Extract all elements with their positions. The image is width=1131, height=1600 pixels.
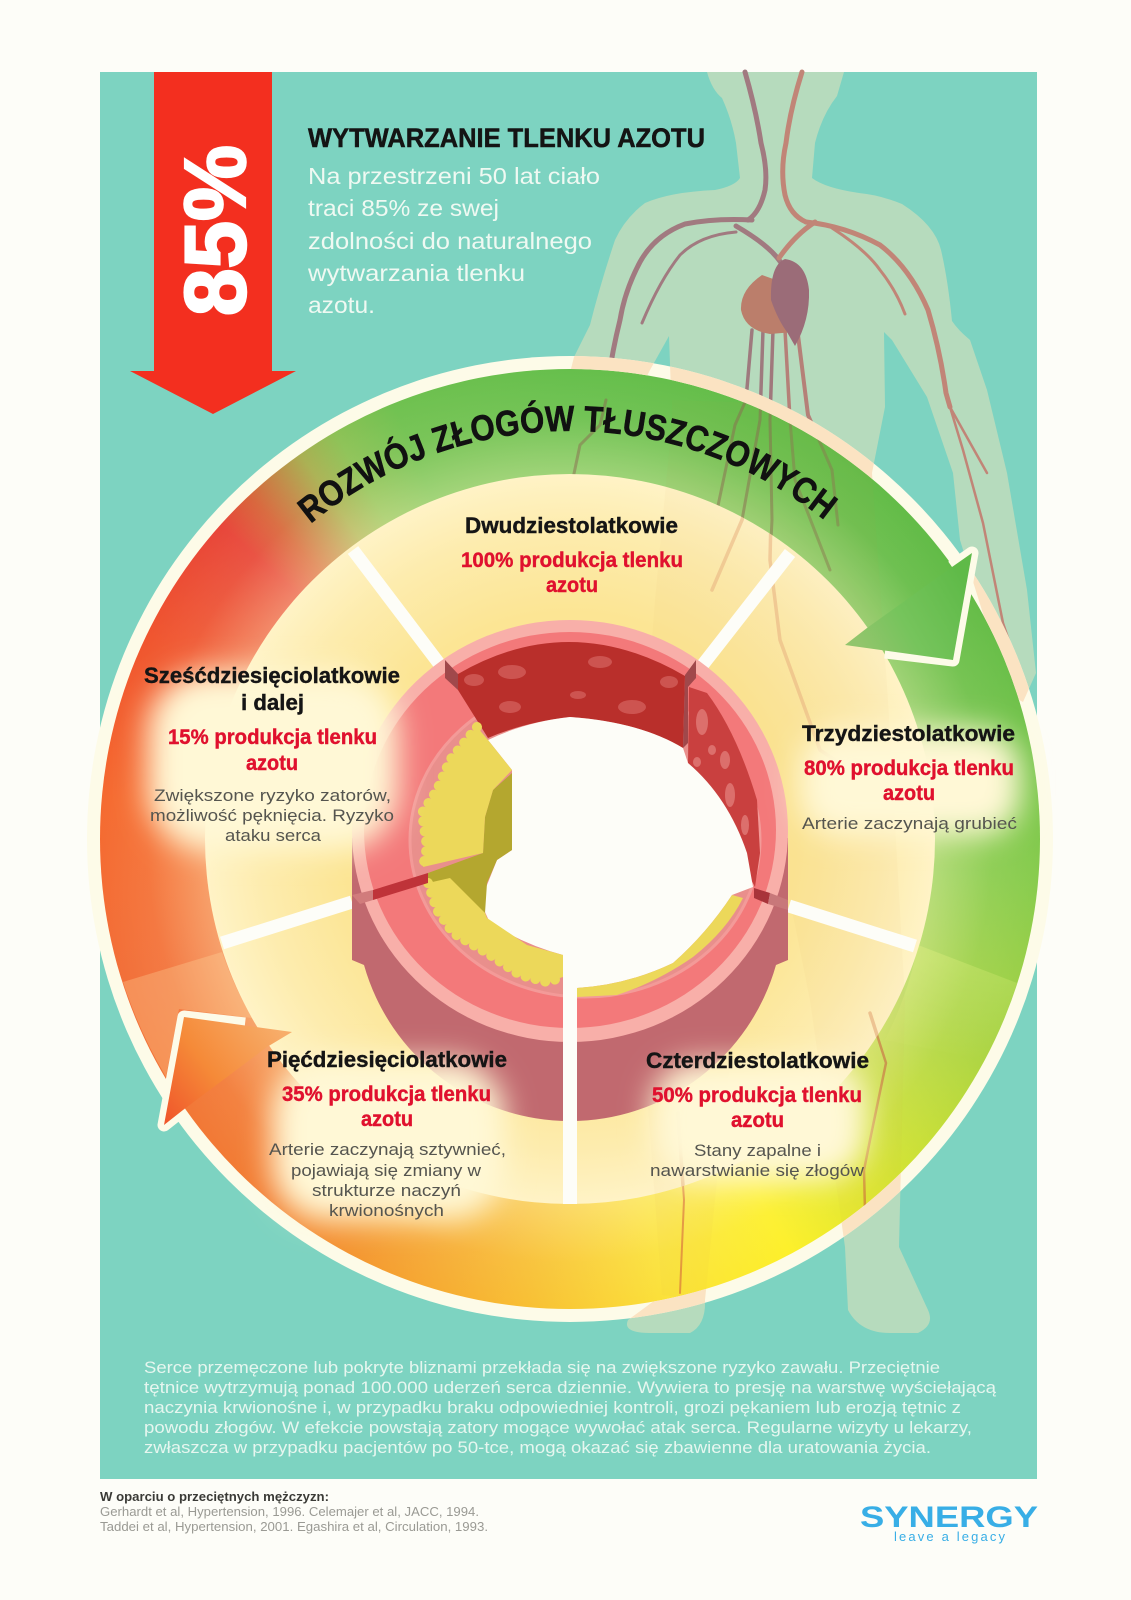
main illustration and text — [100, 72, 1038, 1544]
logo — [860, 1501, 1038, 1544]
intro text: wytwarzania tlenku — [307, 260, 525, 286]
bottom paragraph: Serce przemęczone lub pokryte bliznami przekłada się na zwiększone ryzyko zawału. Przeciętnie — [144, 1358, 940, 1377]
arrow: red 85 percent — [130, 72, 296, 414]
segment: thirties: 80% produkcja tlenku — [804, 757, 1014, 780]
segment: forties: nawarstwianie się złogów — [650, 1161, 865, 1180]
artery right cut band — [754, 888, 788, 910]
segment: fifties: strukturze naczyń — [312, 1181, 461, 1200]
segment: twenties: 100% produkcja tlenku — [461, 549, 683, 572]
intro text: traci 85% ze swej — [308, 195, 499, 221]
yellow plaque lower — [428, 878, 563, 982]
segment: thirties: azotu — [883, 782, 935, 805]
segment: forties: 50% produkcja tlenku — [652, 1084, 862, 1107]
artery outer wall — [352, 838, 788, 1121]
segment: forties: Stany zapalne i — [694, 1141, 821, 1160]
olive plaque cross-section — [428, 773, 512, 913]
segment: sixties: możliwość pęknięcia. Ryzyko — [150, 806, 394, 825]
bottom paragraph — [144, 1358, 997, 1457]
ring inner glow — [100, 369, 1040, 1309]
intro text: Na przestrzeni 50 lat ciało — [308, 163, 600, 189]
green to red gradient ring — [100, 369, 1040, 1309]
teal panel — [100, 72, 1037, 1479]
segment: sixties: i dalej — [241, 690, 304, 715]
bottom paragraph: tętnice wytrzymują ponad 100.000 uderzeń serca dziennie. Wywiera to presję na warstwę wyściełającą — [144, 1378, 997, 1397]
plaque bumps — [422, 727, 477, 867]
segment: fifties: azotu — [361, 1108, 413, 1131]
bottom paragraph: powodu złogów. W efekcie powstają zatory mogące wywołać atak serca. Regularne wizyty u lekarzy, — [144, 1418, 972, 1437]
artery pink rim — [352, 620, 788, 1042]
artery muscle layer — [364, 632, 776, 1028]
segment: sixties: Sześćdziesięciolatkowie — [144, 663, 400, 688]
segment: sixties — [144, 663, 400, 845]
blood vessels — [567, 72, 1012, 790]
inner cream disc — [205, 474, 935, 1204]
segment: sixties: Zwiększone ryzyko zatorów, — [154, 786, 391, 805]
text halos — [148, 672, 1020, 1220]
segment: thirties: Arterie zaczynają grubieć — [802, 814, 1018, 833]
artery lumen — [485, 717, 753, 988]
references — [100, 1490, 488, 1534]
bottom paragraph: naczynia krwionośne i, w przypadku braku odpowiedniej kontroli, grozi pękaniem lub erozją tętnic z — [144, 1398, 961, 1417]
arrow: green head — [845, 553, 972, 660]
segment: fifties: Pięćdziesięciolatkowie — [267, 1047, 507, 1072]
segment: sixties: ataku serca — [225, 826, 322, 845]
logo: SYNERGY — [860, 1501, 1038, 1534]
segment: twenties: azotu — [546, 574, 598, 597]
ring title curved: ROZWÓJ ZŁOGÓW TŁUSZCZOWYCH — [296, 400, 838, 523]
artery inner layer — [410, 683, 760, 997]
body silhouette — [545, 72, 1036, 1333]
cream outer ring — [87, 356, 1053, 1322]
segment: thirties — [802, 721, 1018, 833]
segment: fifties — [267, 1047, 507, 1220]
segment: sixties: azotu — [246, 752, 298, 775]
segment: thirties: Trzydziestolatkowie — [802, 721, 1015, 746]
logo: leave a legacy — [894, 1529, 1006, 1544]
segment: forties: azotu — [731, 1109, 784, 1132]
segment: forties — [646, 1048, 869, 1180]
segment: sixties: 15% produkcja tlenku — [168, 726, 377, 749]
arrow: red 85 percent: 85% — [168, 145, 264, 316]
thin plaque right — [577, 895, 743, 997]
body seen through the ring — [571, 356, 1029, 1318]
arrow: orange head — [164, 1017, 292, 1125]
lower plaque bumps — [428, 883, 563, 982]
references: W oparciu o przeciętnych mężczyzn: — [100, 1490, 329, 1504]
segment: fifties: Arterie zaczynają sztywnieć, — [269, 1140, 506, 1159]
segment: forties: Czterdziestolatkowie — [646, 1048, 869, 1073]
bottom paragraph: zwłaszcza w przypadku pacjentów po 50-tce, mogą okazać się zbawienne dla uratowania życia. — [144, 1438, 931, 1457]
segment: fifties: 35% produkcja tlenku — [282, 1083, 491, 1106]
references: Taddei et al, Hypertension, 2001. Egashira et al, Circulation, 1993. — [100, 1520, 488, 1534]
segment: twenties: Dwudziestolatkowie — [465, 513, 678, 538]
right artery wall with spots — [688, 687, 760, 887]
icon: heart — [741, 259, 809, 346]
lighter ring wedges — [123, 945, 1017, 1077]
intro text: azotu. — [308, 292, 375, 318]
segment: twenties — [461, 513, 683, 597]
yellow plaque upper — [422, 727, 512, 867]
segment: fifties: krwionośnych — [329, 1201, 444, 1220]
intro text: zdolności do naturalnego — [308, 228, 592, 254]
intro text — [307, 163, 600, 318]
references: Gerhardt et al, Hypertension, 1996. Celemajer et al, JACC, 1994. — [100, 1505, 479, 1519]
bottom divider — [563, 955, 577, 1204]
heading: WYTWARZANIE TLENKU AZOTU — [308, 123, 705, 153]
artery cross-section — [352, 620, 788, 1121]
top artery wall with spots — [458, 642, 685, 748]
segment dividers — [222, 550, 915, 946]
segment: fifties: pojawiają się zmiany w — [291, 1161, 482, 1180]
artery cut wedges — [445, 660, 696, 748]
artery left cut band — [352, 873, 428, 904]
